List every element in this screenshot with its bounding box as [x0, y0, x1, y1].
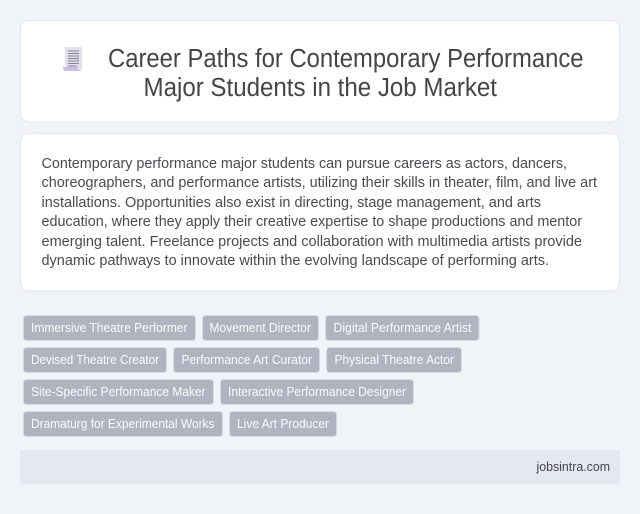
text block: description: emerging talent. Freelance projects and collaboration with multimedia artists provide — [42, 233, 582, 250]
text block: description: Contemporary performance major students can pursue careers as actors, dancers, — [42, 155, 567, 172]
icon: document scroll — [63, 47, 82, 71]
tags: career paths — [24, 316, 479, 436]
footer source text: jobsintra.com — [536, 459, 610, 474]
tag: Digital Performance Artist — [326, 316, 479, 340]
tag: Performance Art Curator — [174, 348, 320, 372]
tag: Physical Theatre Actor: Physical Theatre Actor — [334, 352, 455, 367]
tag: Interactive Performance Designer — [220, 380, 414, 404]
tag: Devised Theatre Creator: Devised Theatre Creator — [31, 352, 160, 367]
text block: description — [42, 155, 598, 269]
text block: description: dynamic pathways to innovate within the evolving landscape of performing arts. — [42, 252, 549, 269]
tag: Movement Director: Movement Director — [210, 320, 312, 335]
heading — [108, 45, 584, 102]
tag: Dramaturg for Experimental Works: Dramaturg for Experimental Works — [31, 416, 215, 431]
tag: Movement Director — [202, 316, 318, 340]
tag: Physical Theatre Actor — [326, 348, 462, 372]
tag: Immersive Theatre Performer: Immersive Theatre Performer — [31, 320, 188, 335]
tag: Live Art Producer — [230, 412, 336, 436]
tag: Live Art Producer: Live Art Producer — [237, 416, 330, 431]
text block: description: education, where they apply their creative expertise to shape productions and mentor — [42, 213, 582, 230]
tag: Performance Art Curator: Performance Art Curator — [182, 352, 313, 367]
footer bar — [20, 450, 620, 484]
tag: Devised Theatre Creator — [24, 348, 166, 372]
tag: Dramaturg for Experimental Works — [24, 412, 222, 436]
tag: Site-Specific Performance Maker — [24, 380, 214, 404]
tag: Digital Performance Artist: Digital Performance Artist — [334, 320, 472, 335]
panel: description — [20, 134, 620, 291]
tag: Interactive Performance Designer: Interactive Performance Designer — [228, 384, 407, 399]
heading: Career Paths for Contemporary Performance — [108, 45, 584, 73]
tag: Site-Specific Performance Maker: Site-Specific Performance Maker — [31, 384, 206, 399]
heading: Major Students in the Job Market — [144, 74, 497, 102]
panel: title card — [20, 20, 620, 122]
text block: description: choreographers, and performance artists, utilizing their skills in theater, film, and live art — [42, 174, 598, 191]
tag: Immersive Theatre Performer — [24, 316, 196, 340]
text block: description: installations. Opportunities also exist in directing, stage management, and arts — [42, 194, 541, 211]
